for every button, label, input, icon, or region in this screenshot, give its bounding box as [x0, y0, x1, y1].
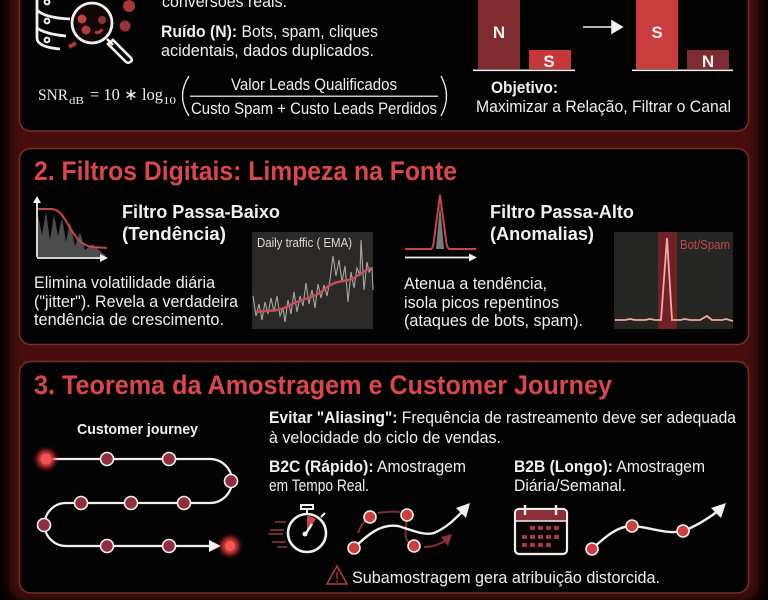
- panel 1: signal and noise: [20, 0, 748, 131]
- chart: daily traffic EMA: [252, 232, 373, 329]
- formula: SNR: = 10 ∗ log: [90, 85, 163, 104]
- formula: SNR: 10: [163, 95, 177, 107]
- diagram: customer journey: Customer journey: [77, 421, 199, 438]
- text: low-pass description: [34, 273, 239, 329]
- text: B2C: em Tempo Real.: [269, 477, 369, 495]
- text: B2B: Diária/Semanal.: [514, 477, 626, 495]
- text: high-pass subtitle: (Anomalias): [490, 223, 594, 244]
- text: low-pass description: tendência de crescimento.: [34, 310, 224, 329]
- formula: SNR: dB: [69, 95, 84, 107]
- text: high-pass description: [404, 274, 583, 330]
- text: objective detail: Maximizar a Relação, Filtrar o Canal: [476, 97, 731, 116]
- chart: bot/spam spike: [614, 232, 733, 329]
- formula: SNR: [38, 76, 446, 118]
- text: noise definition line 2: acidentais, dados duplicados.: [161, 41, 374, 60]
- icon: calendar: [515, 505, 567, 554]
- panel 3: sampling theorem: [20, 362, 748, 593]
- text: high-pass description: (ataques de bots, spam).: [404, 311, 583, 330]
- icon: database with magnifier: [37, 0, 135, 63]
- panel 2: digital filters: [20, 148, 748, 344]
- text: B2B: B2B (Longo): Amostragem: [514, 458, 705, 476]
- text: warning: Subamostragem gera atribuição distorcida.: [352, 568, 660, 587]
- text: aliasing line 2: à velocidade do ciclo de vendas.: [269, 428, 501, 447]
- text: B2C: [269, 458, 466, 495]
- icon: stopwatch: [268, 505, 326, 552]
- chart: after, signal dominant: S: [651, 23, 663, 42]
- formula: SNR: SNR: [38, 87, 68, 104]
- chart: after, signal dominant: [632, 0, 733, 71]
- text: low-pass description: Elimina volatilidade diária: [34, 273, 216, 292]
- chart: before, noise dominant: N: [493, 23, 505, 42]
- text: high-pass description: isola picos repentinos: [404, 293, 559, 312]
- formula: SNR: Valor Leads Qualificados: [231, 76, 397, 94]
- heading 2: 2. Filtros Digitais: Limpeza na Fonte: [34, 156, 457, 186]
- text: high-pass title: Filtro Passa-Alto: [490, 201, 634, 222]
- text: objective: Objetivo:: [491, 78, 558, 97]
- diagram: customer journey: [37, 421, 239, 555]
- chart: before, noise dominant: S: [543, 52, 555, 71]
- arrow: before to after: [583, 21, 622, 33]
- icon: warning triangle: [327, 566, 347, 584]
- chart: B2C real-time sampling: [348, 503, 470, 554]
- text: noise definition: Ruído (N): Bots, spam, cliques: [161, 22, 378, 41]
- chart: daily traffic EMA: Daily traffic ( EMA): [257, 236, 352, 250]
- text: low-pass title: Filtro Passa-Baixo: [122, 201, 280, 222]
- chart: B2B periodic sampling: [586, 503, 726, 555]
- text: B2C: B2C (Rápido): Amostragem: [269, 458, 466, 476]
- chart: after, signal dominant: N: [702, 52, 714, 71]
- icon: low-pass filter: [33, 196, 108, 262]
- icon: high-pass filter: [405, 195, 477, 262]
- text: high-pass description: Atenua a tendência,: [404, 274, 547, 293]
- heading 3: 3. Teorema da Amostragem e Customer Journey: [34, 370, 612, 400]
- chart: before, noise dominant: [473, 0, 575, 71]
- text: low-pass subtitle: (Tendência): [122, 223, 226, 244]
- chart: bot/spam spike: Bot/Spam: [680, 237, 730, 252]
- formula: SNR: Custo Spam + Custo Leads Perdidos: [191, 100, 437, 118]
- text: B2B: [514, 458, 705, 495]
- text: low-pass description: ("jitter"). Revela a verdadeira: [34, 292, 239, 311]
- text: aliasing: Evitar "Aliasing": Frequência de rastreamento deve ser adequada: [269, 408, 736, 427]
